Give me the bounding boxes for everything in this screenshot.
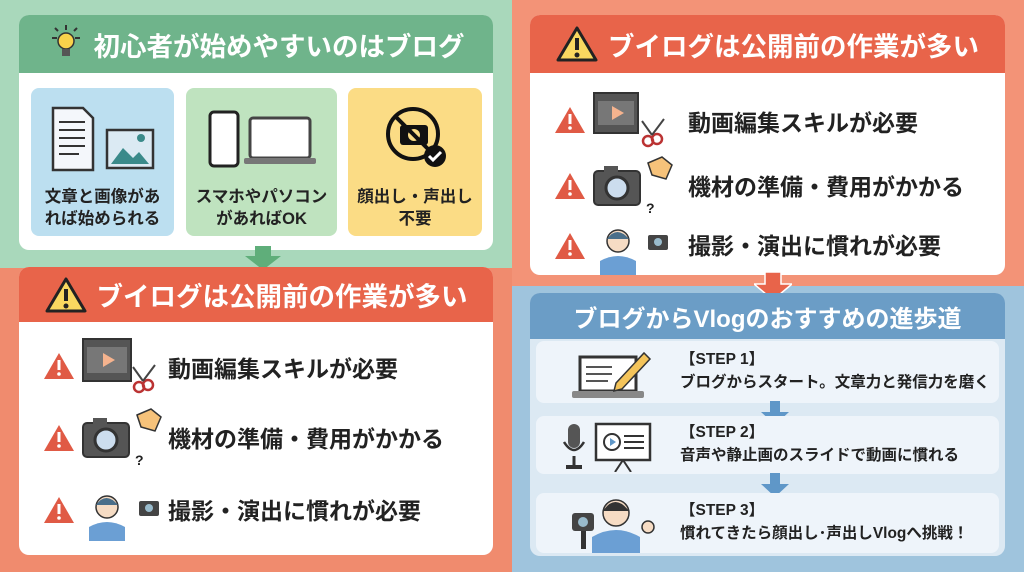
card: no face [348, 88, 482, 236]
heading: vlog work [19, 267, 493, 322]
heading: vlog work right: ブイログは公開前の作業が多い [608, 32, 979, 62]
card: text and images [31, 88, 174, 236]
panel: vlog work right [530, 15, 1005, 275]
row: editing right [555, 92, 918, 148]
step 2 [536, 416, 999, 474]
card: text and images: れば始められる [45, 210, 160, 228]
card: text and images: 文章と画像があ [45, 188, 160, 206]
heading: vlog work: ブイログは公開前の作業が多い [96, 282, 468, 312]
step 3: 慣れてきたら顔出し･声出しVlogへ挑戦！ [680, 525, 968, 542]
step 1 [536, 341, 999, 403]
row: editing right: 動画編集スキルが必要 [688, 110, 918, 136]
row: shooting right: 撮影・演出に慣れが必要 [688, 233, 941, 259]
step 3: 【STEP 3】 [680, 502, 764, 519]
step 1: ブログからスタート。文章力と発信力を磨く [680, 374, 990, 391]
panel: steps [530, 293, 1005, 556]
card: smartphone pc [186, 88, 337, 236]
row: shooting: 撮影・演出に慣れが必要 [168, 498, 421, 524]
card: smartphone pc: があればOK [216, 210, 307, 228]
heading: steps [530, 293, 1005, 339]
heading: vlog work right [530, 15, 1005, 73]
heading: steps: ブログからVlogのおすすめの進歩道 [574, 306, 962, 332]
panel: beginners blog [19, 15, 493, 250]
heading: blog easy: 初心者が始めやすいのはブログ [94, 32, 464, 62]
row: editing [44, 338, 398, 394]
panel: vlog work left [19, 267, 493, 555]
row: equipment right [555, 156, 964, 215]
card: no face: 顔出し・声出し [357, 188, 473, 206]
card: smartphone pc: スマホやパソコン [196, 188, 327, 206]
arrow: red down [754, 272, 792, 293]
row: equipment [44, 408, 444, 467]
arrow: green down [245, 246, 281, 267]
row: equipment: 機材の準備・費用がかかる [168, 426, 444, 452]
arrow: step 1 to 2 [761, 401, 789, 416]
row: shooting right [555, 229, 941, 275]
row: equipment right: 機材の準備・費用がかかる [688, 174, 964, 200]
heading: blog easy [19, 15, 493, 73]
step 2: 音声や静止画のスライドで動画に慣れる [680, 447, 959, 464]
arrow: step 2 to 3 [761, 473, 789, 493]
card: no face: 不要 [398, 210, 432, 228]
row: editing: 動画編集スキルが必要 [168, 356, 398, 382]
step 2: 【STEP 2】 [680, 424, 764, 441]
step 3 [536, 493, 999, 553]
row: shooting [44, 495, 421, 541]
step 1: 【STEP 1】 [680, 351, 764, 368]
